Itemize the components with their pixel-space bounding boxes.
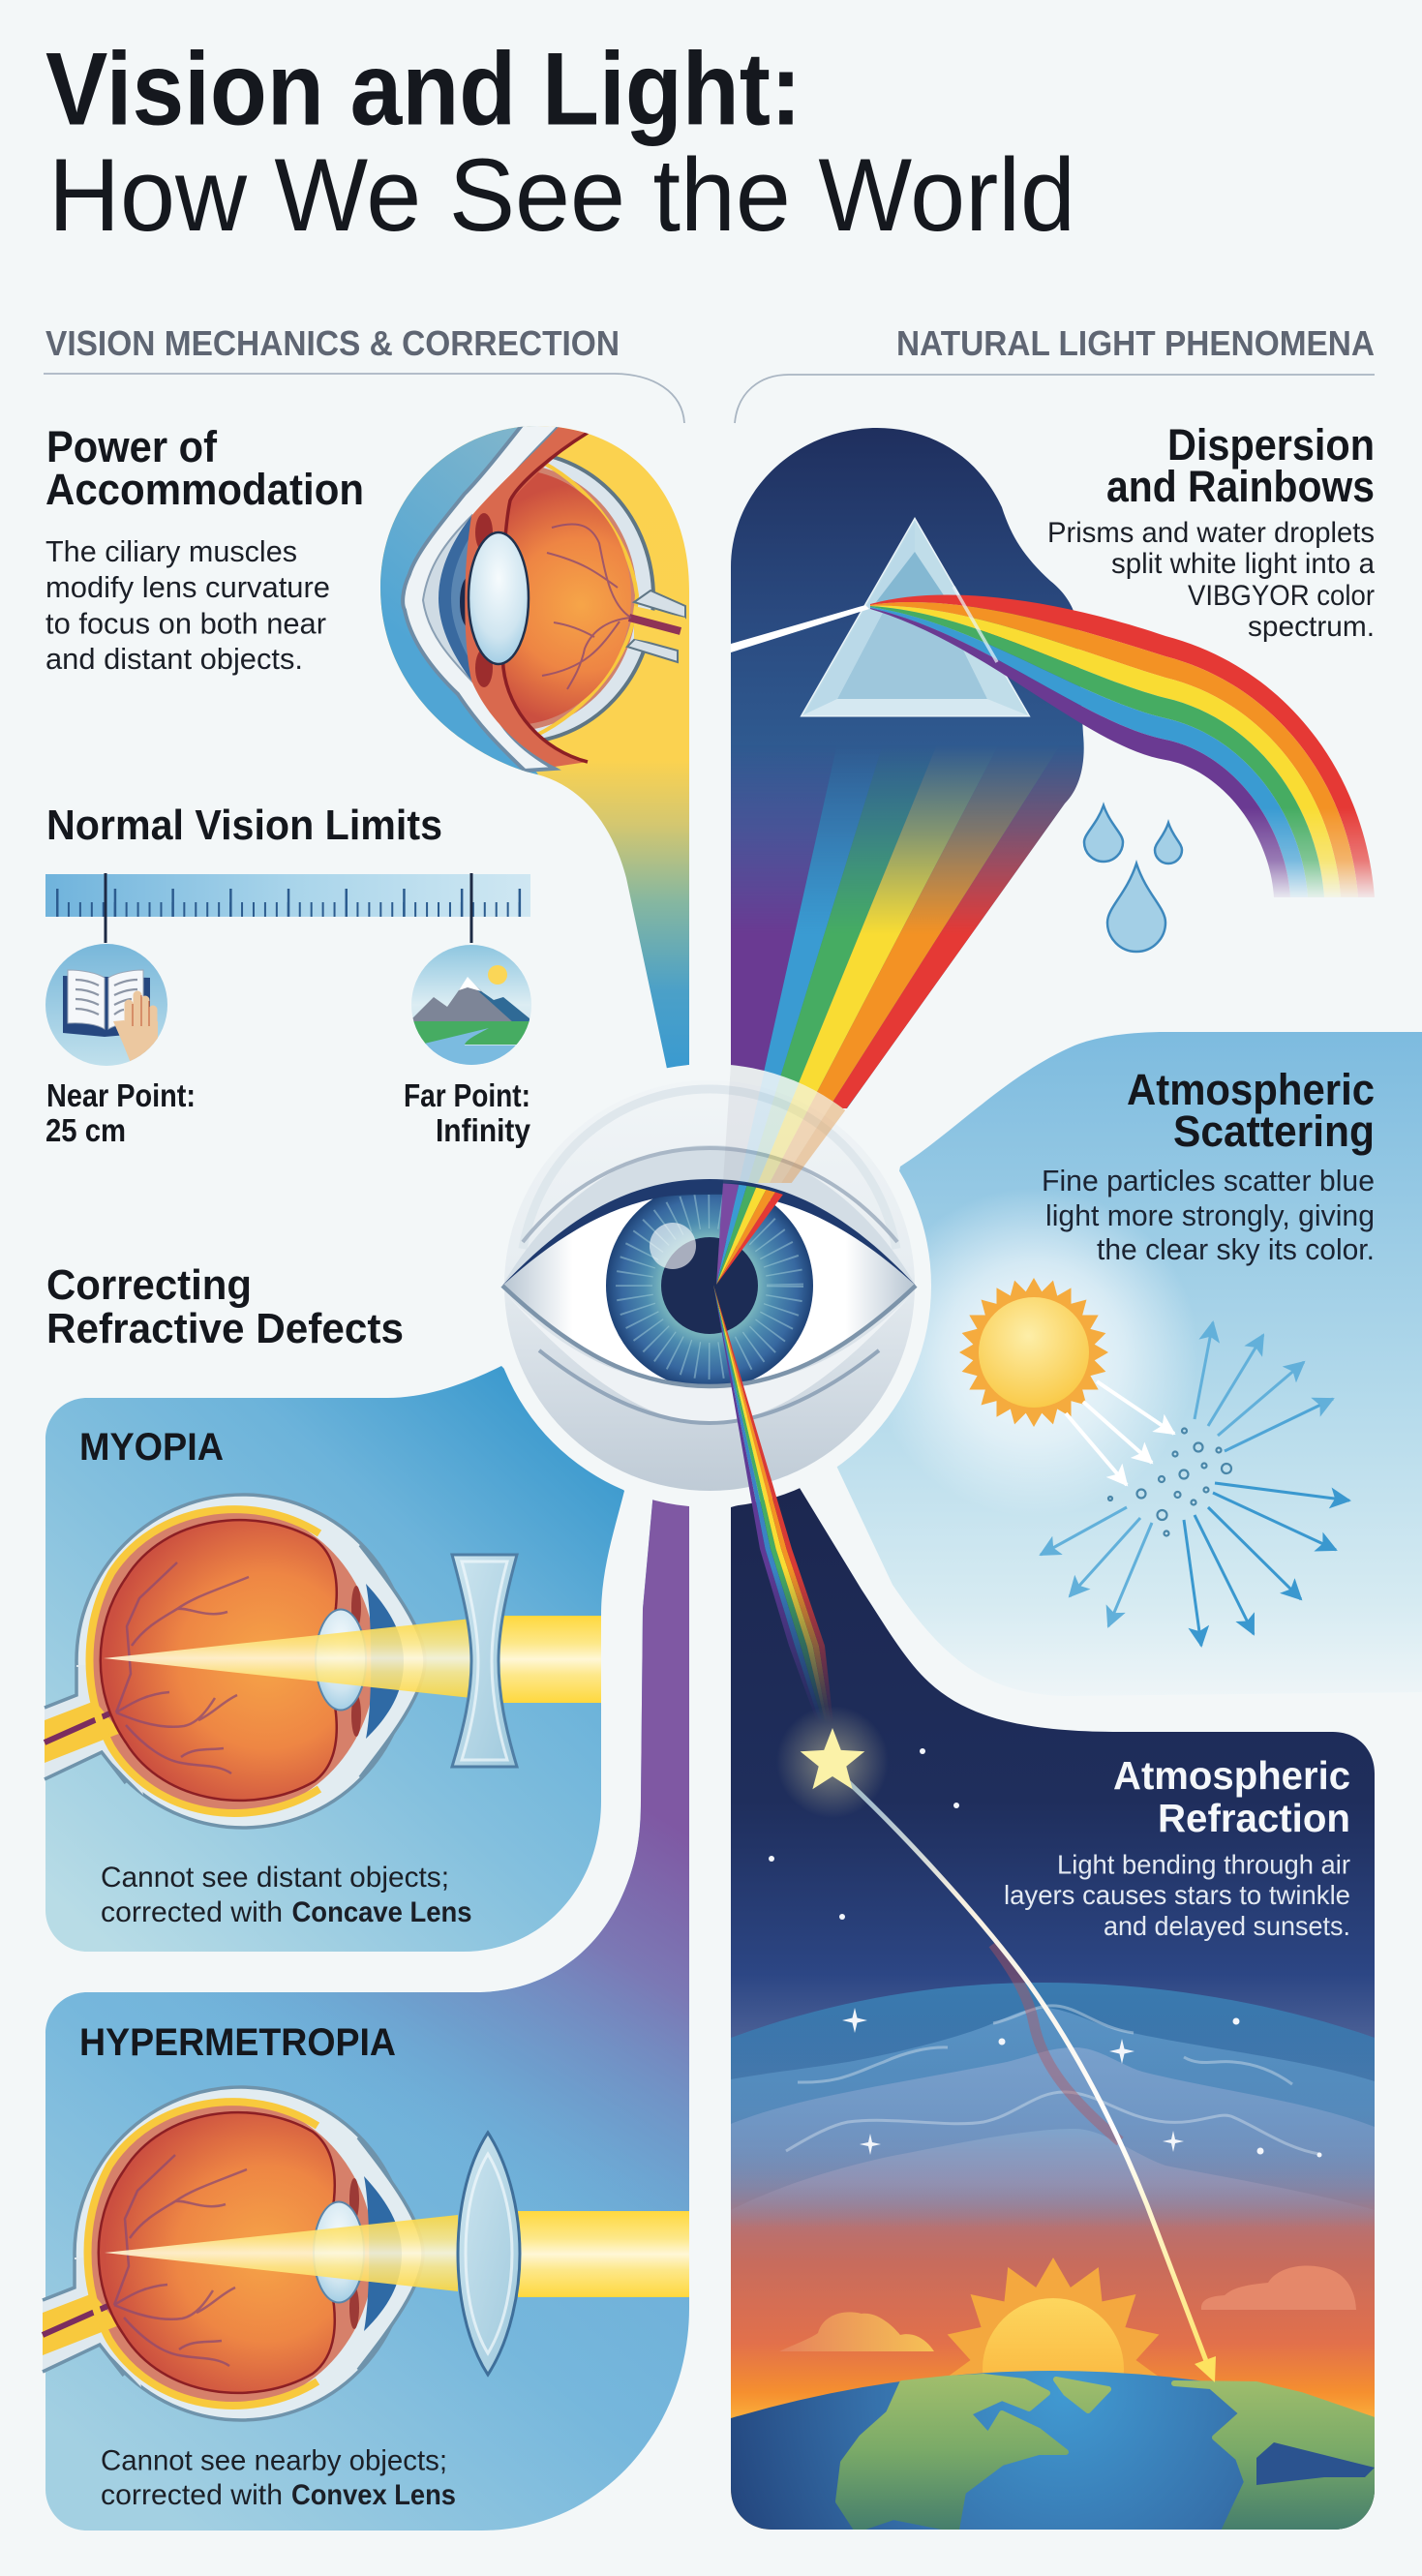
central eye [488,1064,931,1507]
ruler [45,873,530,943]
text block: refraction: layers causes stars to twinkle [1004,1880,1350,1910]
caption: myopia: Cannot see distant objects; [101,1862,449,1894]
eyeball [504,1080,915,1491]
convex lens [458,2133,520,2375]
heading: dispersion and rainbows: and Rainbows [1106,462,1375,511]
text block: accommodation: to focus on both near [45,606,326,641]
secondary refracted ray [993,1944,1120,2141]
panel: atmospheric scattering [836,1032,1422,1696]
heading: hypermetropia: HYPERMETROPIA [79,2021,396,2064]
caption: hypermetropia: Convex Lens [291,2479,456,2511]
heading: power of accommodation: Power of [46,422,218,471]
heading: atmospheric scattering [1127,1065,1375,1156]
white light ray into prism [731,605,869,652]
text block: refraction: and delayed sunsets. [1104,1911,1350,1941]
rainbow [870,594,1375,897]
concave lens [452,1555,517,1767]
icon: star [776,1706,889,1818]
stars [769,1748,1322,2157]
clouds [779,2266,1356,2351]
label: far point: Infinity [436,1112,531,1148]
label: near point [45,1077,196,1148]
light beam: hypermetropia [105,2211,689,2297]
section heading: vision mechanics: VISION MECHANICS & CORRECTION [45,323,620,363]
heading: power of accommodation: Accommodation [45,465,364,514]
title: Vision and Light: [45,31,802,147]
section heading: natural light: NATURAL LIGHT PHENOMENA [896,323,1375,363]
light beam: myopia [104,1616,601,1703]
lower eyelid [506,1294,912,1423]
icon: mountain landscape [410,945,532,1065]
caption: myopia [101,1862,472,1928]
text block: refraction: Light bending through air [1057,1849,1350,1880]
title [45,31,1075,253]
icon: sun [959,1254,1133,1434]
prism edge over rainbow [953,587,997,662]
title: How We See the World [48,136,1075,253]
panel: hypermetropia [43,1481,689,2531]
saturated spectrum in iris [716,1183,783,1285]
label: far point: Far Point: [404,1077,530,1113]
section heading: vision mechanics [44,323,684,423]
heading: atmospheric scattering: Scattering [1173,1106,1375,1156]
text block: accommodation: The ciliary muscles [45,534,297,568]
heading: power of accommodation [45,422,364,514]
sun glow [864,1188,1203,1517]
text block: dispersion [1047,517,1375,643]
arrows: incoming white light [1066,1381,1174,1485]
heading: correcting refractive defects: Correcting [46,1261,252,1309]
pale spectrum on glass [723,1065,846,1183]
caption: myopia: Concave Lens [292,1896,472,1928]
label: near point: 25 cm [45,1112,126,1148]
refracted spectrum beam to star [713,1285,834,1733]
text block: scattering: the clear sky its color. [1097,1232,1375,1266]
text block: dispersion: split white light into a [1111,548,1375,580]
heading: atmospheric refraction: Atmospheric [1113,1753,1350,1798]
atmosphere layers [731,1983,1375,2225]
panel: dispersion background [731,428,1084,1108]
caption: hypermetropia: Cannot see nearby objects; [101,2445,447,2476]
air turbulence strands [786,2006,1319,2154]
text block: accommodation: and distant objects. [45,642,303,676]
spectrum fan toward the eye [731,755,1083,1108]
eyelid lines [502,1179,916,1286]
heading: correcting refractive defects [46,1261,404,1352]
text block: scattering: Fine particles scatter blue [1042,1164,1375,1197]
heading: atmospheric refraction [1113,1753,1350,1840]
icon: book and hand [45,944,167,1066]
panel: accommodation eye cross-section [373,418,689,1069]
heading: myopia: MYOPIA [79,1426,224,1469]
eye opening [502,1183,916,1386]
upper eyelid [502,1145,916,1286]
text block: dispersion: VIBGYOR color [1188,580,1375,612]
particles [1108,1429,1231,1535]
heading: atmospheric refraction: Refraction [1158,1796,1350,1840]
label: near point: Near Point: [46,1077,196,1113]
earth [731,2371,1375,2530]
halo [488,1064,931,1507]
heading: atmospheric scattering: Atmospheric [1127,1065,1375,1114]
panel: atmospheric refraction [731,1488,1375,2530]
iris and pupil [606,1193,813,1384]
eye diagram: myopia [45,1495,425,1828]
eye diagram: hypermetropia [43,2087,423,2420]
panel: myopia [45,1366,624,1952]
icon: water drops [1084,805,1182,952]
text block: accommodation: modify lens curvature [45,570,330,604]
setting sun [947,2258,1160,2376]
text block: scattering: light more strongly, giving [1045,1198,1375,1232]
section heading: natural light [735,323,1375,423]
heading: dispersion and rainbows [1106,420,1375,511]
text block: dispersion: spectrum. [1248,611,1375,643]
text block: refraction [1004,1849,1350,1941]
caption: myopia: corrected with [101,1896,283,1928]
caption: hypermetropia: corrected with [101,2479,283,2511]
text block: scattering [1042,1164,1375,1266]
arrows: scattered blue light [1041,1322,1349,1646]
heading: dispersion and rainbows: Dispersion [1167,420,1375,470]
heading: normal vision limits: Normal Vision Limits [46,802,442,849]
label: far point [404,1077,531,1148]
prism [802,520,1028,715]
heading: correcting refractive defects: Refractive Defects [46,1305,404,1352]
caption: hypermetropia [101,2445,456,2511]
text block: dispersion: Prisms and water droplets [1047,517,1375,549]
text block: accommodation [45,534,330,676]
refracted ray with arrow [842,1776,1216,2382]
